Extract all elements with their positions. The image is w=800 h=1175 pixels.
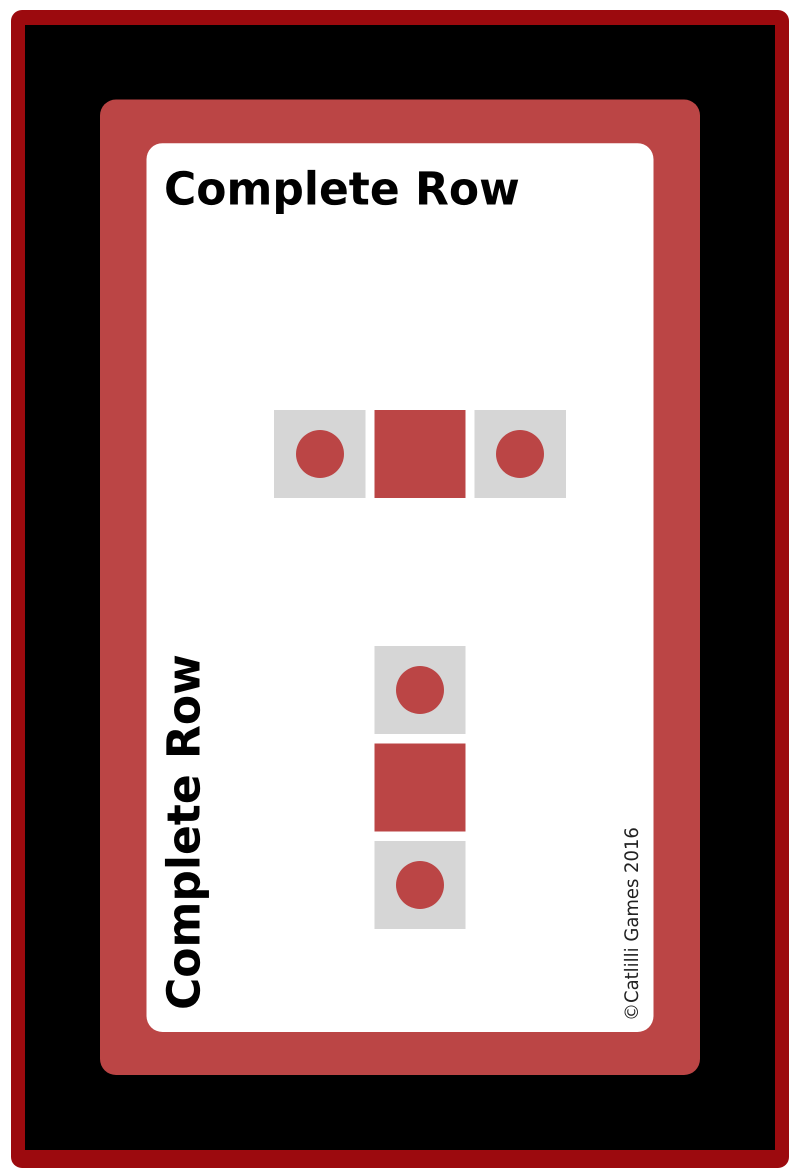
copyright text: ©Catlilli Games 2016 <box>622 827 643 1021</box>
tile: top with dot <box>374 646 466 734</box>
red panel <box>100 100 700 1075</box>
horizontal row of tiles <box>274 410 566 498</box>
tile: solid middle <box>374 744 466 832</box>
heading: horizontal title: Complete Row <box>164 162 520 216</box>
vertical column of tiles <box>374 646 466 929</box>
tile: left with dot <box>274 410 366 498</box>
tile: right with dot <box>474 410 566 498</box>
white inner panel <box>146 143 654 1032</box>
tile: bottom with dot <box>374 841 466 929</box>
tile: solid centre <box>374 410 466 498</box>
heading: vertical title: Complete Row <box>158 654 210 1010</box>
